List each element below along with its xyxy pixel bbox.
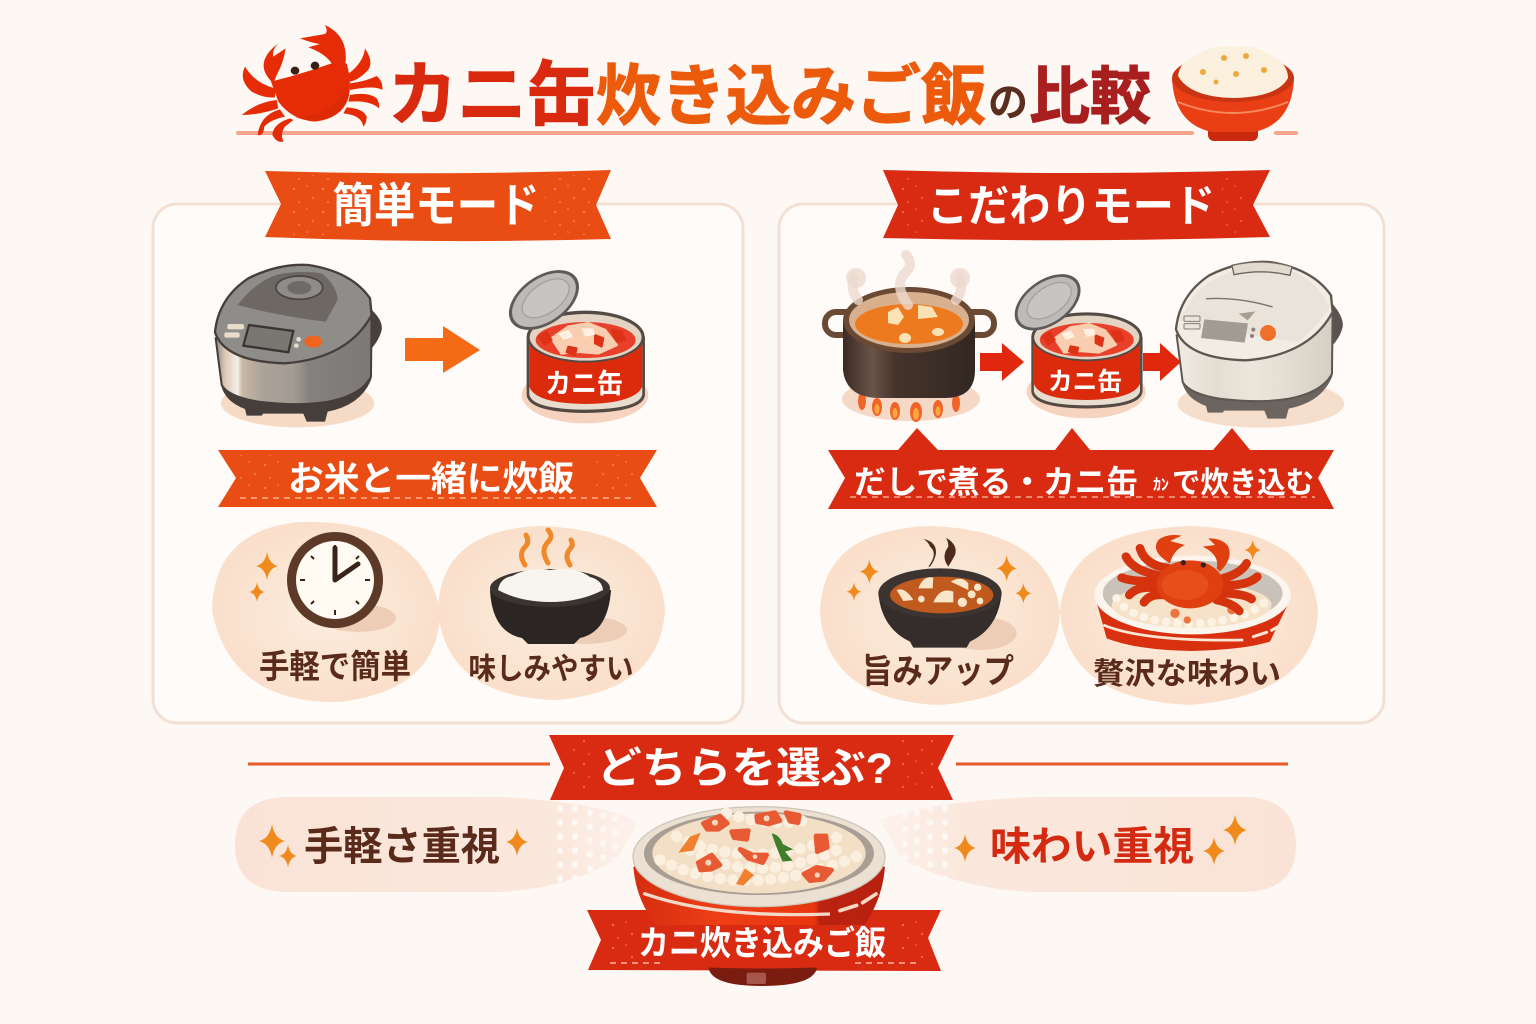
icon: clock [249, 532, 396, 632]
icon: crab rice bowl [633, 807, 885, 986]
arrow [1143, 343, 1181, 381]
icon: crab can: カニ缶 [545, 369, 623, 399]
icon: black rice bowl with steam [490, 530, 627, 644]
panel frame [153, 204, 743, 723]
title text: の [988, 81, 1028, 125]
heading ribbon: which to choose [549, 735, 954, 800]
icon: crab rice dish [1094, 535, 1291, 651]
left pill: ease priority [235, 797, 638, 892]
benefit: flavour soaks in [438, 526, 665, 700]
title text [388, 56, 1151, 134]
title text: カニ缶 [388, 56, 596, 134]
benefit: luxurious taste: 贅沢な味わい [1093, 658, 1281, 691]
ribbon: method with pointers: ｶﾝ [1153, 477, 1169, 494]
right pill: flavour priority: 味わい重視 [990, 825, 1194, 869]
heading ribbon: careful mode [883, 170, 1270, 240]
heading ribbon: easy mode: 簡単モード [332, 179, 540, 232]
title underline [238, 131, 1296, 135]
crab rice bowl with label ribbon [587, 807, 941, 986]
ribbon: method with pointers: だしで煮る・カニ缶 [854, 464, 1138, 500]
icon: crab can [498, 258, 648, 423]
heading ribbon: which to choose: どちらを選ぶ? [597, 745, 893, 793]
icon: rice bowl [1172, 46, 1294, 141]
ribbon: crab rice back [587, 910, 941, 971]
benefit: luxurious taste [1060, 526, 1318, 705]
icon: soup bowl [847, 538, 1031, 650]
icon: white rice cooker [1176, 262, 1344, 428]
icon: crab can: カニ缶 [1048, 368, 1122, 396]
title text: 炊き込みご飯 [596, 59, 986, 133]
panel: careful mode [779, 170, 1384, 723]
divider lines [248, 762, 1288, 766]
ribbon: method with pointers: で炊き込む [1172, 467, 1314, 500]
title text: 比較 [1029, 63, 1151, 132]
benefit: umami up: 旨みアップ [862, 653, 1014, 691]
benefit: umami up [820, 526, 1060, 705]
benefit: easy: 手軽で簡単 [259, 648, 411, 685]
icon: crab [242, 25, 382, 142]
ribbon: method with pointers [828, 428, 1334, 509]
arrow [405, 326, 480, 373]
left pill: ease priority: 手軽さ重視 [304, 825, 500, 869]
icon: crab can [1004, 263, 1146, 418]
icon: grey rice cooker [215, 265, 382, 427]
heading ribbon: careful mode: こだわりモード [927, 182, 1215, 231]
ribbon: method: お米と一緒に炊飯 [288, 460, 574, 499]
arrow [980, 343, 1024, 381]
crab rice bowl with label ribbon: カニ炊き込みご飯 [638, 925, 886, 963]
title header [238, 25, 1296, 142]
panel: easy mode [153, 170, 743, 723]
ribbon: method [218, 450, 657, 507]
heading ribbon: easy mode [265, 170, 611, 241]
icon: pot on burner [825, 255, 994, 422]
benefit: easy [212, 522, 440, 702]
benefit: flavour soaks in: 味しみやすい [468, 653, 634, 686]
right pill: flavour priority [880, 797, 1296, 892]
panel frame [779, 204, 1384, 723]
ribbon: crab rice label [648, 925, 880, 968]
